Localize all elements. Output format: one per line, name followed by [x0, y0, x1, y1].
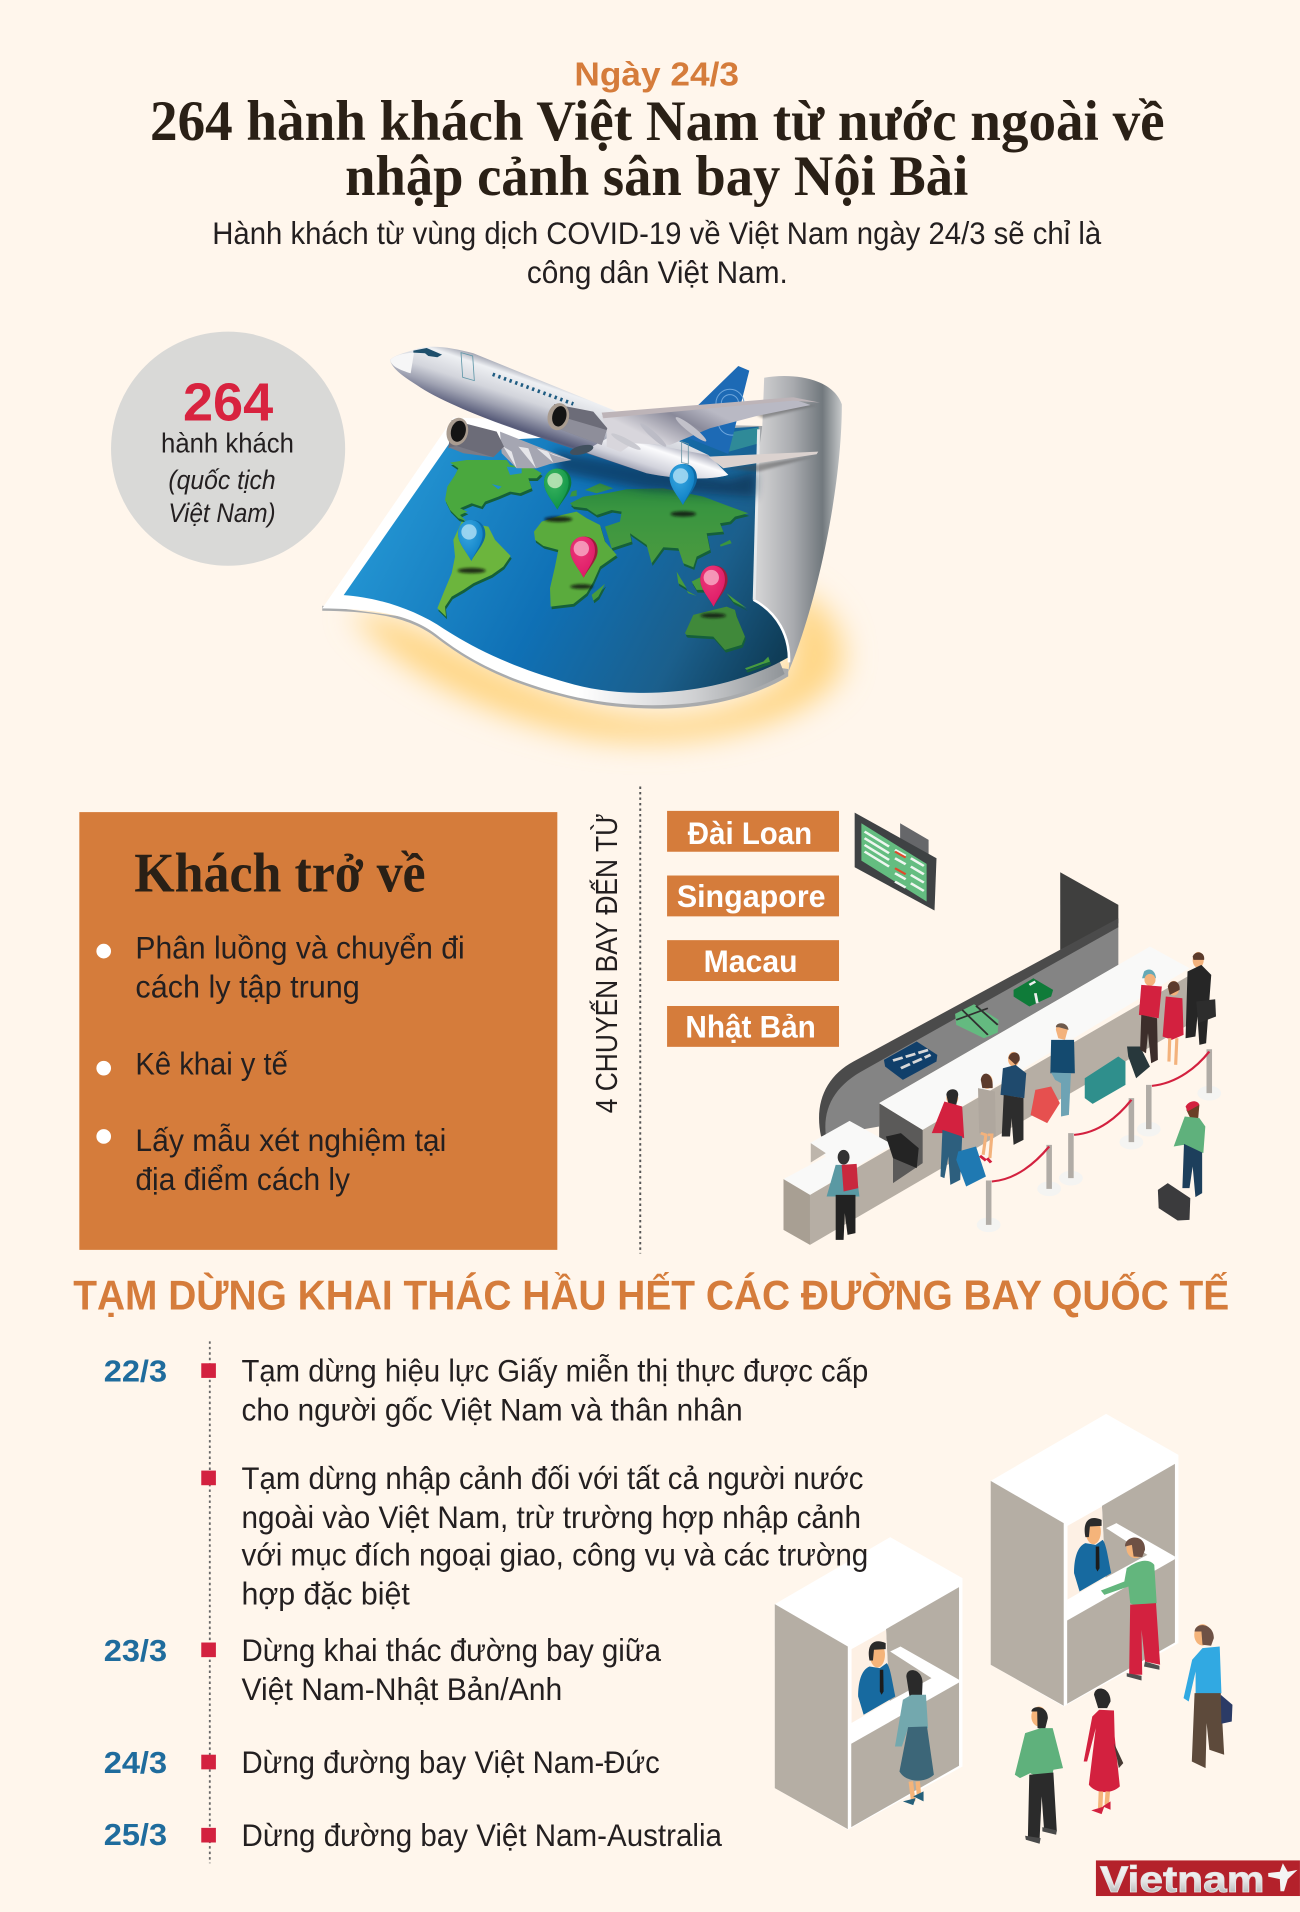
person: man in green — [1174, 1101, 1205, 1197]
person: man in blue tee — [1184, 1624, 1232, 1768]
tag: Macau: Macau — [704, 944, 798, 979]
person: man in navy jacket — [1001, 1052, 1026, 1145]
person: man with blue suitcase — [932, 1089, 986, 1186]
conveyor — [819, 872, 1118, 1137]
stabilizer — [708, 452, 818, 468]
tag: Taiwan: Đài Loan — [688, 816, 812, 851]
entry: 23/3: 23/3 — [104, 1634, 167, 1668]
stanchions and ropes — [977, 1049, 1221, 1232]
entry: 24/3: Dừng đường bay Việt Nam-Đức — [242, 1745, 660, 1780]
map curl — [754, 376, 842, 672]
person: woman in red dress — [1163, 981, 1184, 1065]
subtitle: công dân Việt Nam. — [527, 255, 788, 290]
stat circle: 264 passengers — [111, 332, 345, 566]
far wing — [602, 397, 820, 452]
stat circle: 264 passengers: hành khách — [161, 427, 294, 458]
tag: Japan: Nhật Bản — [685, 1010, 816, 1045]
illustration: immigration booths — [775, 1414, 1232, 1844]
title — [150, 90, 1165, 208]
bullet: routing and quarantine: Phân luồng và chuyển đi — [135, 930, 465, 965]
entry: 23/3: Việt Nam-Nhật Bản/Anh — [242, 1672, 562, 1707]
person: man with red suitcase — [1031, 1023, 1075, 1123]
tag: Japan — [667, 1006, 839, 1047]
person: man in suit — [1186, 952, 1216, 1045]
bullet: routing and quarantine: cách ly tập trung — [135, 969, 360, 1004]
entry: 25/3: 25/3 — [104, 1818, 167, 1852]
person: customer in teal and skirt — [895, 1670, 934, 1805]
flight board — [855, 813, 936, 911]
entry: 22/3 entry suspension: Tạm dừng nhập cảnh đối với tất cả người nước — [242, 1461, 863, 1496]
pins — [458, 464, 728, 618]
pin: green Europe — [544, 469, 571, 510]
entry: 22/3 entry suspension — [201, 1461, 868, 1612]
clerk — [858, 1641, 895, 1715]
subtitle: Hành khách từ vùng dịch COVID-19 về Việt Nam ngày 24/3 sẽ chỉ là — [212, 216, 1102, 251]
entry: 22/3 entry suspension: hợp đặc biệt — [242, 1577, 410, 1612]
entry: 23/3 — [104, 1633, 662, 1707]
entry: 25/3: Dừng đường bay Việt Nam-Australia — [242, 1818, 723, 1853]
continent: South America — [437, 522, 511, 617]
booth: left — [775, 1537, 962, 1830]
far engine and flaps — [444, 415, 572, 468]
title: 264 hành khách Việt Nam từ nước ngoài về — [150, 90, 1165, 153]
person: woman in grey dress — [978, 1074, 996, 1163]
paper — [322, 418, 785, 705]
panel: returning passengers — [79, 812, 557, 1250]
pin: red Africa — [570, 537, 598, 578]
stat circle: 264 passengers: Việt Nam) — [168, 498, 276, 528]
entry: 23/3: Dừng khai thác đường bay giữa — [242, 1633, 662, 1668]
section heading: TẠM DỪNG KHAI THÁC HẦU HẾT CÁC ĐƯỜNG BAY QUỐC TẾ — [73, 1271, 1229, 1319]
bullet: routing and quarantine — [96, 930, 465, 1004]
tail fin — [677, 366, 749, 454]
counter — [784, 947, 1190, 1245]
paper underside — [322, 606, 788, 709]
title: nhập cảnh sân bay Nội Bài — [345, 145, 968, 208]
pin: blue South America — [458, 520, 485, 561]
person: customer in green and red — [1101, 1538, 1160, 1680]
entry: 22/3 visa exemption — [104, 1354, 868, 1428]
islands — [592, 572, 770, 670]
fuselage — [390, 347, 728, 478]
booth: right — [991, 1414, 1178, 1706]
origin tags — [667, 811, 839, 1047]
timeline — [104, 1341, 868, 1863]
entry: 22/3 entry suspension: với mục đích ngoại giao, công vụ và các trường — [242, 1538, 868, 1573]
person: man in green sweater — [1015, 1706, 1063, 1844]
pin shadows — [458, 511, 726, 618]
continent: Africa — [534, 512, 617, 607]
continent: North America — [445, 460, 542, 521]
near engine — [545, 401, 607, 445]
person: man with cap — [1139, 970, 1162, 1063]
entry: 22/3 visa exemption: cho người gốc Việt Nam và thân nhân — [242, 1393, 743, 1428]
bullet: sampling: địa điểm cách ly — [135, 1162, 350, 1197]
illustration: baggage claim — [784, 813, 1221, 1245]
bullet: sampling — [96, 1123, 446, 1197]
belt bags — [884, 978, 1053, 1080]
map glow — [352, 586, 843, 742]
entry: 24/3: 24/3 — [104, 1746, 167, 1780]
tag: Singapore: Singapore — [677, 879, 826, 914]
bullet: health declaration: Kê khai y tế — [135, 1046, 288, 1081]
pin: blue Asia — [670, 464, 697, 505]
map ocean — [344, 427, 788, 693]
entry: 22/3 visa exemption: Tạm dừng hiệu lực Giấy miễn thị thực được cấp — [242, 1354, 868, 1389]
plane shadows — [553, 450, 757, 497]
person: traveller with backpack — [827, 1150, 859, 1240]
entry: 22/3 visa exemption: 22/3 — [104, 1355, 167, 1389]
continents — [437, 460, 771, 673]
luggage on floor — [1085, 1047, 1190, 1220]
clerk — [1074, 1518, 1111, 1591]
stat circle: 264 passengers: (quốc tịch — [168, 465, 276, 495]
logo: Vietnam+: Vietnam — [1100, 1858, 1265, 1900]
tag: Macau — [667, 940, 839, 981]
panel heading: Khách trở về — [134, 842, 426, 904]
header — [150, 55, 1165, 290]
airplane — [390, 347, 820, 497]
pin: red Oceania — [700, 566, 728, 607]
bullet: sampling: Lấy mẫu xét nghiệm tại — [135, 1123, 446, 1158]
person: woman in red dress — [1084, 1688, 1123, 1814]
stat circle: 264 passengers: 264 — [183, 373, 273, 433]
subtitle — [212, 216, 1102, 290]
illustration: airplane over world map — [322, 347, 843, 742]
tag: Taiwan — [667, 811, 839, 852]
vertical label: four flights from: 4 CHUYẾN BAY ĐẾN TỪ — [589, 813, 624, 1113]
continent: Australia — [685, 607, 745, 650]
entry: 22/3 entry suspension: ngoài vào Việt Nam, trừ trường hợp nhập cảnh — [242, 1500, 861, 1535]
continent: Eurasia — [570, 488, 748, 567]
date kicker: Ngày 24/3 — [574, 55, 739, 92]
